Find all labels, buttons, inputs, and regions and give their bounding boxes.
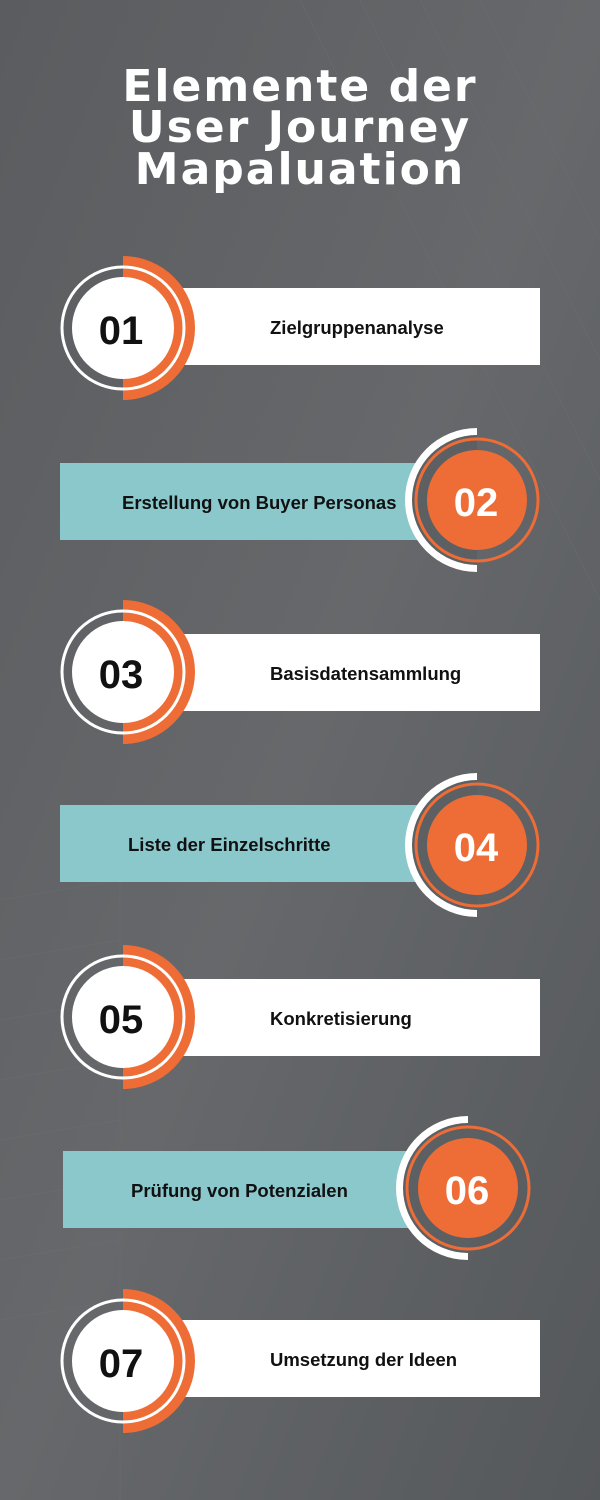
step 07: Umsetzung der Ideen <box>270 1349 457 1370</box>
title <box>122 61 478 195</box>
bar: Prüfung von Potenzialen <box>63 1151 413 1228</box>
step 02: Erstellung von Buyer Personas <box>122 492 397 513</box>
step 01: Zielgruppenanalyse <box>270 317 444 338</box>
title: User Journey <box>129 102 471 153</box>
icon: circle 06: 06 <box>445 1169 489 1213</box>
bar: Konkretisierung <box>180 979 540 1056</box>
step 04 <box>60 773 538 917</box>
icon: circle 07: 07 <box>99 1342 143 1386</box>
icon: circle 05: 05 <box>99 998 143 1042</box>
icon: circle 02: 02 <box>454 481 498 525</box>
icon: circle 01: 01 <box>99 309 143 353</box>
icon: circle 07 <box>62 1289 195 1433</box>
step 02 <box>60 428 538 572</box>
icon: circle 04 <box>405 773 538 917</box>
bar: Umsetzung der Ideen <box>180 1320 540 1397</box>
icon: circle 04: 04 <box>454 826 499 870</box>
step 01 <box>62 256 540 400</box>
step 04: Liste der Einzelschritte <box>128 834 331 855</box>
title: Elemente der <box>122 61 478 112</box>
bar: Liste der Einzelschritte <box>60 805 420 882</box>
icon: circle 01 <box>62 256 195 400</box>
step 07 <box>62 1289 540 1433</box>
step 03 <box>62 600 540 744</box>
bar: Zielgruppenanalyse <box>180 288 540 365</box>
step 06 <box>63 1116 529 1260</box>
step 05 <box>62 945 540 1089</box>
icon: circle 05 <box>62 945 195 1089</box>
step 05: Konkretisierung <box>270 1008 412 1029</box>
icon: circle 03 <box>62 600 195 744</box>
icon: circle 03: 03 <box>99 653 143 697</box>
step 03: Basisdatensammlung <box>270 663 461 684</box>
title: Mapaluation <box>135 144 465 195</box>
icon: circle 06 <box>396 1116 529 1260</box>
icon: circle 02 <box>405 428 538 572</box>
step 06: Prüfung von Potenzialen <box>131 1180 348 1201</box>
bar: Basisdatensammlung <box>180 634 540 711</box>
bar: Erstellung von Buyer Personas <box>60 463 420 540</box>
